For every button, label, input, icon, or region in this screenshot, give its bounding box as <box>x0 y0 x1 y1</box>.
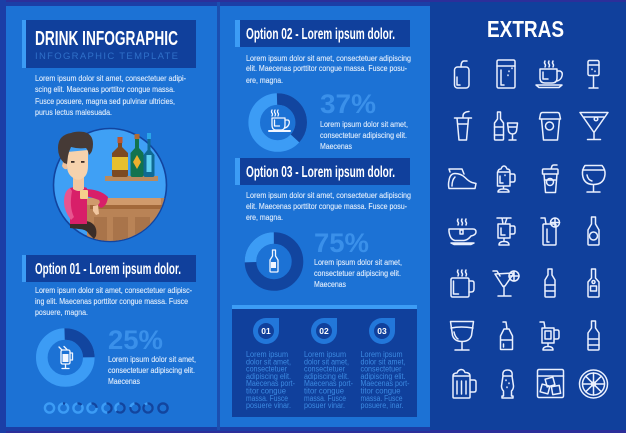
step 03: Maecenas port- <box>360 379 410 388</box>
icon: foam mug <box>498 166 515 192</box>
stat 75%: consectetuer adipiscing elit. <box>314 268 401 278</box>
icon: soda cup <box>454 112 472 140</box>
step 02: adipiscing elit. <box>304 372 349 381</box>
option 02 text: ere, magna. <box>246 75 283 85</box>
stat 25%: 25% <box>108 325 163 355</box>
icon: margarita <box>493 271 519 296</box>
icon: coffee cup <box>269 110 290 131</box>
step 02: titor congue <box>304 386 345 396</box>
donut chart 75% <box>250 238 298 285</box>
step 03: consectetuer <box>360 365 402 374</box>
heading: option 01: Option 01 - Lorem ipsum dolor. <box>35 261 181 278</box>
icon: label bottle <box>588 269 599 297</box>
step 01: massa. Fusce <box>246 394 289 403</box>
step 02: massa. Fusce <box>304 394 347 403</box>
step 03: posuere, inar. <box>360 401 404 410</box>
icon: irish glass <box>59 346 72 368</box>
step 03: dolor sit amet, <box>360 357 406 366</box>
step 03: adipiscing elit. <box>360 372 406 381</box>
step 03: massa. Fusce <box>360 394 403 403</box>
step 02: dolor sit amet, <box>304 357 349 366</box>
option 01 text <box>35 285 192 317</box>
title block <box>22 20 196 68</box>
step 01: 01 <box>261 326 271 336</box>
stat 25%: Lorem ipsum dolor sit amet, <box>108 354 196 364</box>
intro text: scing elit. Maecenas porttitor congue massa. <box>35 84 175 94</box>
title block: DRINK INFOGRAPHIC <box>35 28 178 50</box>
icon: citrus slice <box>580 370 608 398</box>
icon: coffee cup saucer <box>536 61 562 88</box>
icon: beer mug <box>453 370 476 398</box>
panel: left column <box>6 6 217 427</box>
step 01: adipiscing elit. <box>246 372 291 381</box>
icon: large wine glass <box>450 322 474 350</box>
stat 75%: Lorem ipsum dolor sit amet, <box>314 257 402 267</box>
stat 37% <box>320 89 408 151</box>
heading: option 03 <box>235 158 410 185</box>
icon: wine bottle <box>588 321 599 350</box>
step 03: 03 <box>377 326 387 336</box>
donut chart 25% <box>42 334 89 381</box>
icon: ice glass <box>538 370 564 398</box>
option 03 text: ere, magna. <box>246 212 283 222</box>
intro text <box>35 73 186 117</box>
title block: INFOGRAPHIC TEMPLATE <box>35 51 178 62</box>
option 02 text: elit. Maecenas porttitor congue massa. Fusce posu- <box>246 63 407 73</box>
stat 37%: consectetuer adipiscing elit. <box>320 130 407 140</box>
icon: champagne flute <box>588 60 599 88</box>
man <box>58 132 108 239</box>
icon: wine glass <box>582 166 605 192</box>
stat 75%: Maecenas <box>314 279 346 289</box>
icon: cup with straw <box>542 165 558 192</box>
panel: middle column <box>220 6 430 427</box>
icon: irish coffee <box>540 322 559 350</box>
intro text: Lorem ipsum dolor sit amet, consectetuer adipi- <box>35 73 186 83</box>
stat 25%: Maecenas <box>108 376 140 386</box>
icon: tea cup <box>449 219 476 244</box>
option 03 text <box>246 190 411 222</box>
progress rings <box>45 403 168 413</box>
shelf <box>105 176 158 181</box>
icon: bottle with straw <box>500 322 512 350</box>
donut chart 37% <box>254 99 301 146</box>
step 01: posuere vinar. <box>246 401 291 410</box>
icon: cocktail mug <box>497 218 515 245</box>
stat 25% <box>108 325 196 386</box>
step 01: consectetuer <box>246 365 287 374</box>
intro text: Fusce posuere, magna sed pulvinar ultricies, <box>35 96 175 106</box>
step 01 <box>246 318 295 410</box>
stat 37%: Maecenas <box>320 141 352 151</box>
icon: water glass <box>497 60 515 88</box>
icon: long neck bottle <box>545 269 555 297</box>
icon: steaming mug <box>451 270 474 297</box>
icon: martini <box>580 112 608 140</box>
step 02: Maecenas port- <box>304 379 353 388</box>
heading: option 01 <box>22 255 196 282</box>
heading: option 02 <box>235 20 410 47</box>
option 02 text <box>246 53 411 85</box>
stat 75%: 75% <box>314 228 369 258</box>
icon grid <box>448 60 608 398</box>
intro text: purus lectus malesuada. <box>35 107 112 117</box>
icon: tall glass lemon <box>541 218 560 245</box>
step 03 <box>360 318 410 410</box>
stat 75% <box>314 228 402 289</box>
bottle: green <box>130 134 144 177</box>
illustration: bartender at bar <box>54 128 167 248</box>
step 01: dolor sit amet, <box>246 357 291 366</box>
heading: extras: EXTRAS <box>487 16 564 42</box>
icon: beer glass <box>502 370 514 398</box>
stat 37%: Lorem ipsum dolor sit amet, <box>320 119 408 129</box>
option 01 text: posuere, magna. <box>35 307 88 317</box>
panel: three steps <box>232 305 417 417</box>
icon: bottle and glass <box>494 112 518 140</box>
icon: bottle <box>270 250 278 272</box>
step 02 <box>304 318 353 410</box>
step 02: consectetuer <box>304 365 345 374</box>
panel: extras <box>448 16 608 398</box>
option 03 text: elit. Maecenas porttitor congue massa. Fusce posu- <box>246 201 407 211</box>
option 03 text: Lorem ipsum dolor sit amet, consectetuer adipiscing <box>246 190 411 200</box>
option 01 text: ing elit. Maecenas porttitor congue massa. Fusce <box>35 296 188 306</box>
icon: kettle <box>448 169 476 188</box>
icon: can <box>454 61 469 88</box>
step 02: Lorem ipsum <box>304 350 346 359</box>
step 03: Lorem ipsum <box>360 350 403 359</box>
icon: beer bottle <box>588 217 599 245</box>
heading: option 03: Option 03 - Lorem ipsum dolor. <box>246 164 395 181</box>
option 01 text: Lorem ipsum dolor sit amet, consectetuer adipisc- <box>35 285 192 295</box>
step 01: Maecenas port- <box>246 379 295 388</box>
step 03: titor congue <box>360 386 401 396</box>
heading: option 02: Option 02 - Lorem ipsum dolor. <box>246 26 395 43</box>
stat 25%: consectetuer adipiscing elit. <box>108 365 195 375</box>
stat 37%: 37% <box>320 89 376 119</box>
step 02: posuer vinar. <box>304 401 345 410</box>
bottle: brown <box>112 137 128 177</box>
bottle: teal <box>144 133 154 177</box>
step 02: 02 <box>319 326 329 336</box>
step 01: Lorem ipsum <box>246 350 288 359</box>
option 02 text: Lorem ipsum dolor sit amet, consectetuer adipiscing <box>246 53 411 63</box>
icon: takeaway coffee <box>540 112 560 140</box>
step 01: titor congue <box>246 386 287 396</box>
